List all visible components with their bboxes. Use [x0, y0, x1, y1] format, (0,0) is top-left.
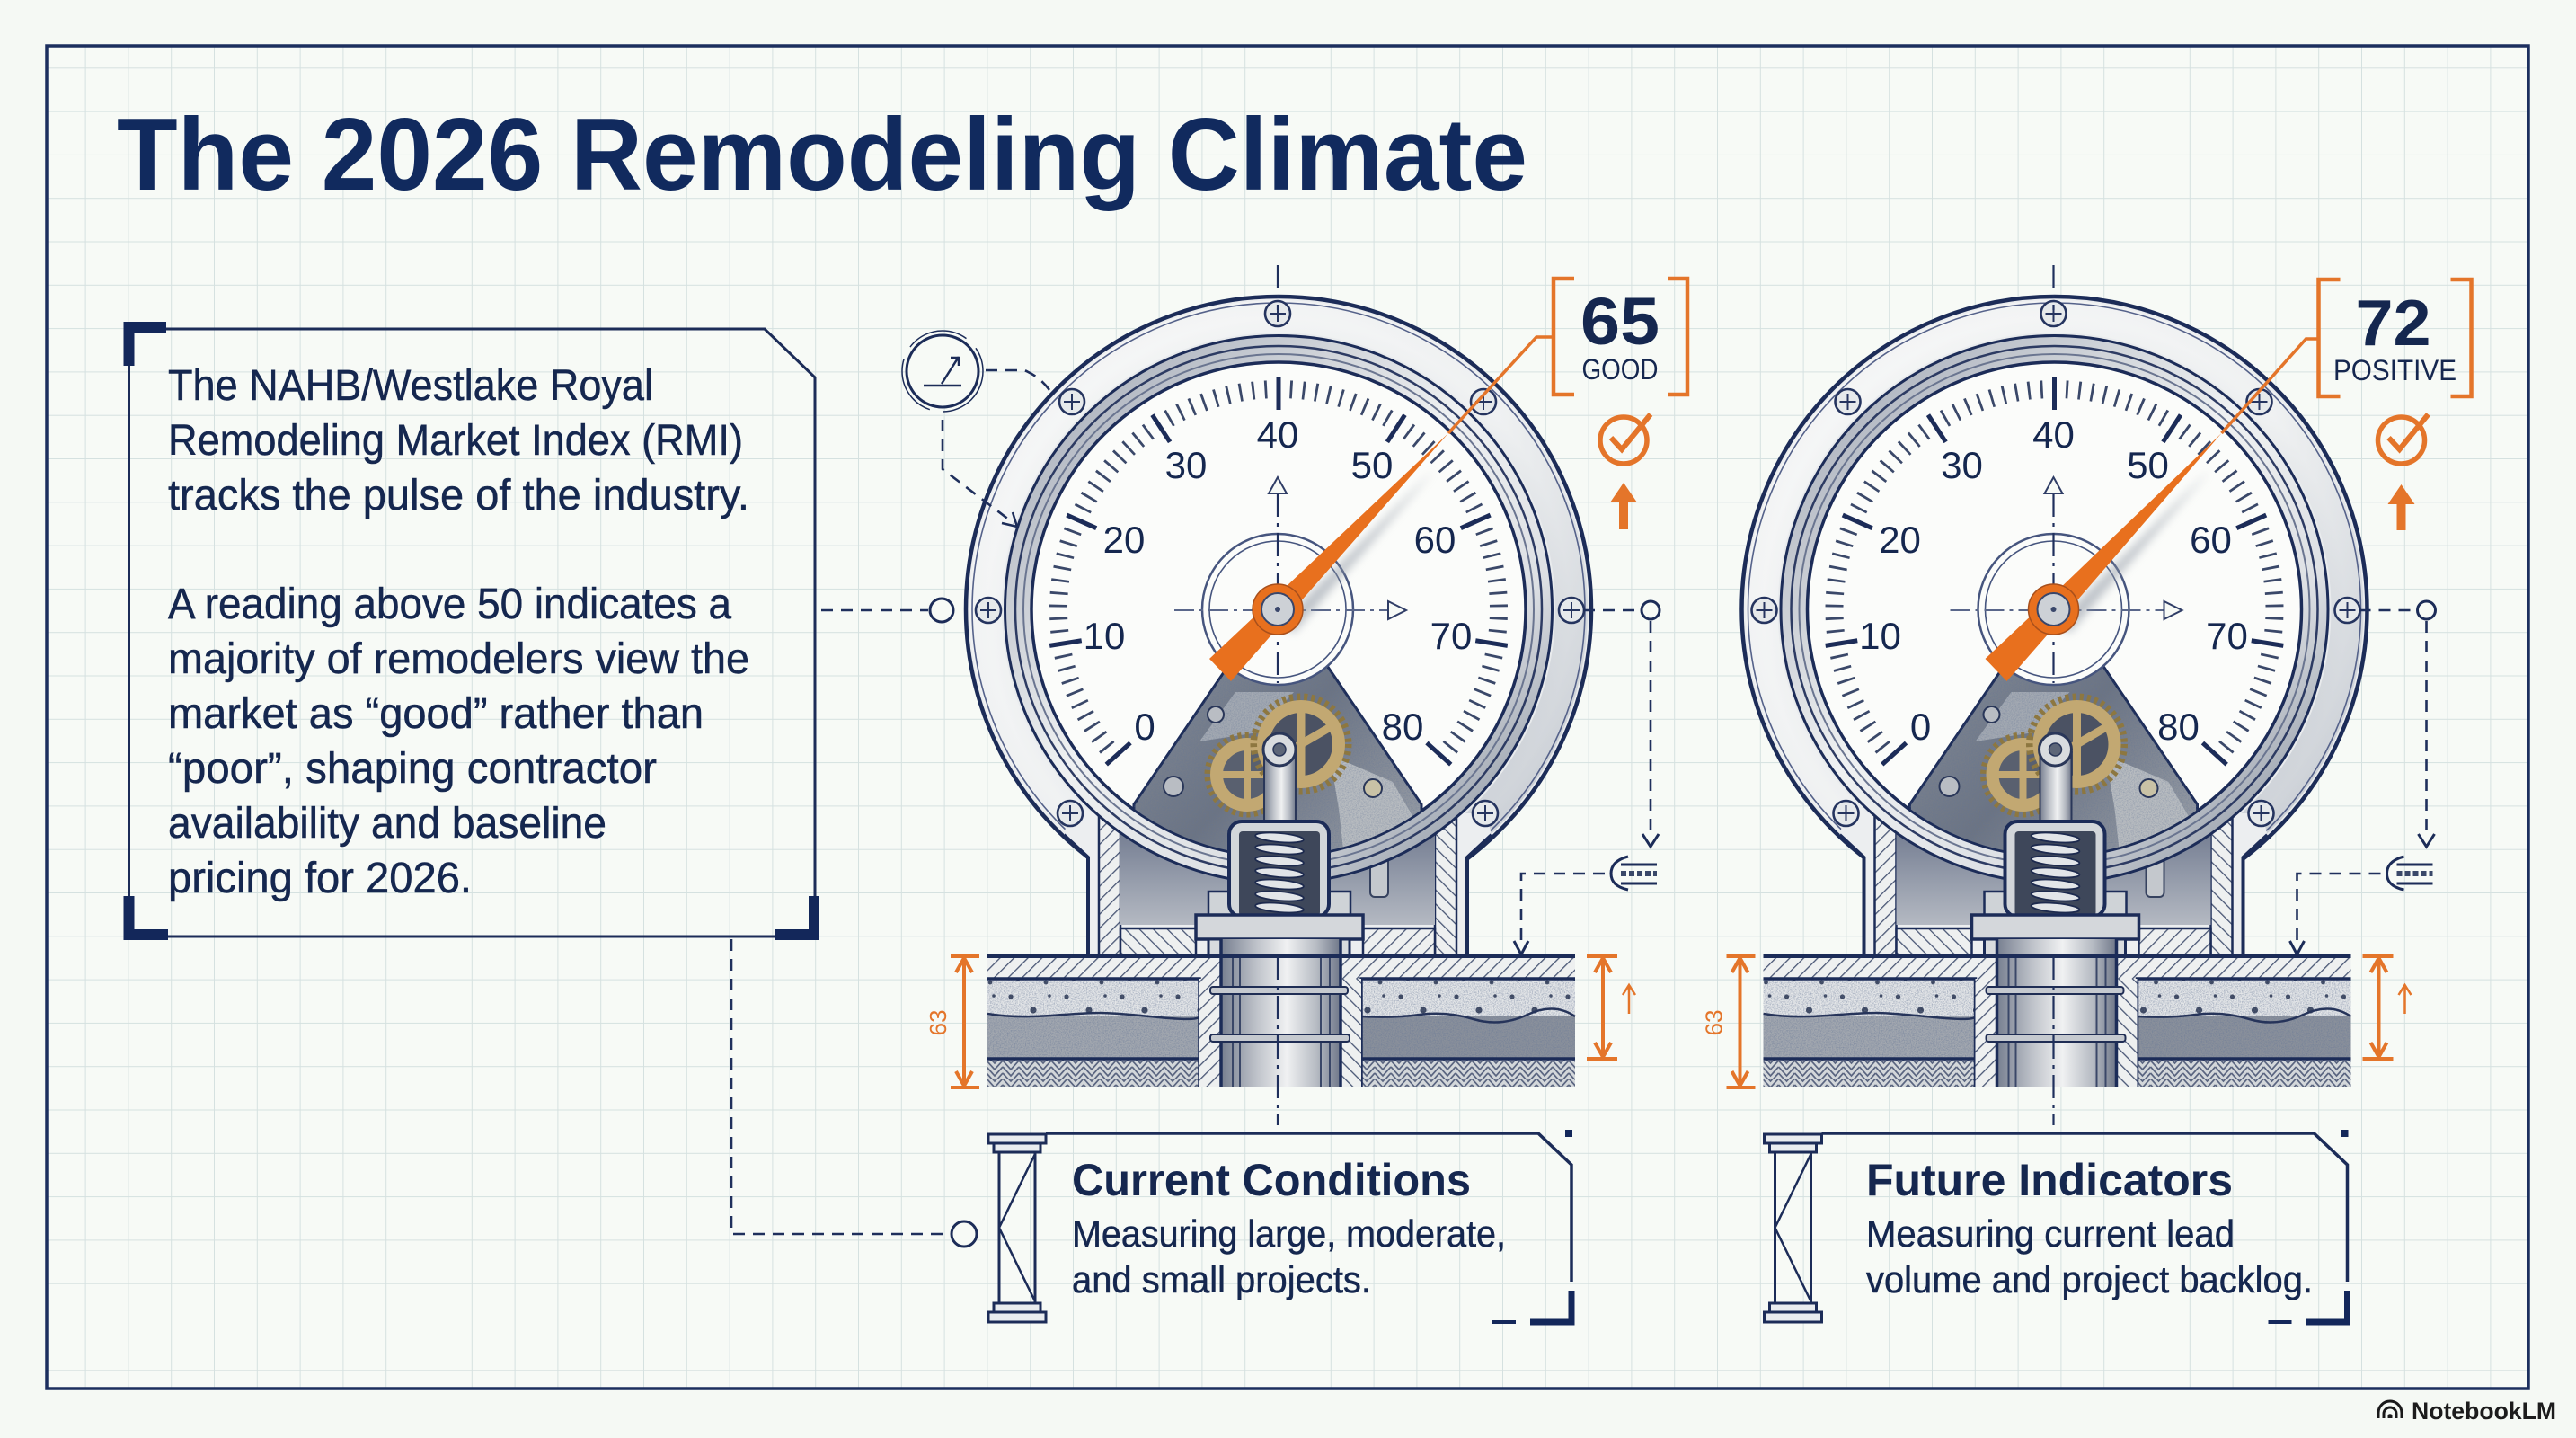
explanation text: tracks the pulse of the industry.: [168, 472, 749, 519]
value box: 72 positive: 72: [2356, 288, 2431, 360]
panel outline: [129, 329, 815, 936]
gauge: future indicators: [1700, 265, 2471, 1322]
gauge base housing: [1840, 813, 2268, 956]
connector: panel to first gauge: [821, 599, 953, 622]
connector: right bolt down to note: [1583, 601, 1660, 847]
dial numbers: 50: [2127, 444, 2169, 486]
panel description: Measuring large, moderate,: [1072, 1212, 1506, 1255]
panel description: Measuring current lead: [1866, 1212, 2235, 1255]
NotebookLM watermark: NotebookLM: [2412, 1398, 2556, 1425]
foundation cross-section: [987, 939, 1575, 1087]
connector: panel to current conditions: [731, 939, 977, 1247]
dial cross-hair arrows: [1174, 477, 1406, 619]
value box: 72 positive: [2318, 280, 2471, 396]
explanation text: [168, 362, 749, 902]
panel heading: Future Indicators: [1866, 1155, 2233, 1205]
panel heading: Current Conditions: [1072, 1155, 1471, 1205]
value box: 65 good: GOOD: [1581, 353, 1659, 386]
value leader line: [2221, 339, 2318, 433]
needle shadow: [2056, 469, 2210, 633]
icon: orange check: [1600, 414, 1651, 464]
gauge bolts: [1752, 301, 2359, 826]
dial numbers: 70: [1430, 615, 1472, 657]
gauge bezel rings: [1781, 336, 2327, 883]
explanation text: A reading above 50 indicates a: [168, 581, 731, 628]
dimension: left orange: [925, 956, 979, 1087]
spring and collar: [1971, 821, 2138, 956]
needle at 72: [1986, 433, 2221, 681]
dial numbers: [1859, 413, 2248, 748]
panel description: volume and project backlog.: [1866, 1258, 2313, 1300]
panel corner bracket: [2306, 1291, 2347, 1322]
needle at 65: [1209, 433, 1448, 681]
foundation cross-section: [1763, 939, 2350, 1087]
dial numbers: 20: [1103, 519, 1145, 561]
gauge bolts: [976, 301, 1584, 826]
arrow: orange up: [1610, 483, 1637, 529]
panel description: [1072, 1212, 1506, 1300]
icon: column: [988, 1134, 1046, 1322]
spring and collar: [1196, 821, 1363, 956]
arrow: orange up: [2388, 484, 2415, 530]
explanation text: market as “good” rather than: [168, 690, 704, 738]
dial hub window: [1202, 534, 1353, 685]
dial numbers: 30: [1165, 444, 1207, 486]
explanation text: availability and baseline: [168, 800, 606, 848]
dial numbers: 60: [1414, 519, 1456, 561]
dial numbers: 30: [1941, 444, 1983, 486]
panel description: and small projects.: [1072, 1258, 1371, 1300]
value box: 65 good: [1554, 279, 1687, 395]
dial numbers: [1084, 413, 1472, 748]
dimension: left orange: [1700, 956, 1756, 1087]
explanation text: pricing for 2026.: [168, 855, 472, 902]
gauge outer ring: [966, 297, 1591, 922]
icon: tool badge with leaders: [902, 331, 1053, 527]
dial hub window: [1978, 534, 2129, 685]
panel outline: [1046, 1133, 1571, 1282]
dimension: left orange: 63: [925, 1010, 952, 1035]
panel: RMI explanation: [129, 327, 815, 936]
gauge bezel rings: [1005, 336, 1552, 883]
icon: column: [1765, 1134, 1822, 1322]
explanation text: Remodeling Market Index (RMI): [168, 417, 743, 465]
panel: current conditions: [988, 1130, 1572, 1322]
dial tick marks: [1049, 377, 1508, 765]
dial numbers: 50: [1351, 444, 1393, 486]
icon: orange check: [2377, 414, 2428, 464]
icon: small annotation note: [1514, 857, 1657, 954]
dial numbers: 40: [2032, 413, 2075, 456]
dial numbers: 20: [1879, 519, 1921, 561]
needle shadow: [1279, 469, 1435, 633]
exposed gear mechanism: [1910, 593, 2200, 899]
corner brackets: [129, 327, 814, 935]
dial numbers: 70: [2206, 615, 2248, 657]
connector: right bolt down to note: [2359, 601, 2435, 847]
value leader line: [1448, 337, 1553, 433]
dimension: left orange: 63: [1700, 1010, 1727, 1035]
dial numbers: 0: [1910, 706, 1931, 748]
dial cross-hair arrows: [1950, 477, 2182, 619]
dial numbers: 10: [1859, 615, 1901, 657]
dial numbers: 80: [1382, 706, 1423, 748]
gauge: current conditions: [902, 265, 1687, 1322]
center line: [2052, 265, 2055, 1125]
dial numbers: 0: [1134, 706, 1155, 748]
explanation text: The NAHB/Westlake Royal: [168, 362, 653, 410]
gauge outer ring: [1741, 297, 2367, 922]
value box: 72 positive: POSITIVE: [2333, 354, 2456, 386]
panel description: [1866, 1212, 2313, 1300]
dial numbers: 80: [2157, 706, 2200, 748]
title: The 2026 Remodeling Climate: [117, 98, 1527, 212]
exposed gear mechanism: [1134, 593, 1424, 899]
center line: [1277, 265, 1279, 1125]
dial numbers: 60: [2190, 519, 2232, 561]
panel outline: [1822, 1133, 2347, 1282]
explanation text: “poor”, shaping contractor: [168, 745, 657, 793]
dimension: right orange: [2363, 956, 2412, 1059]
dial tick marks: [1826, 377, 2283, 765]
icon: small annotation note: [2289, 857, 2433, 954]
dial numbers: 10: [1084, 615, 1125, 657]
dial numbers: 40: [1257, 413, 1298, 456]
gauge base housing: [1064, 813, 1492, 956]
panel corner bracket: [1530, 1291, 1571, 1322]
explanation text: majority of remodelers view the: [168, 635, 749, 683]
value box: 65 good: 65: [1580, 284, 1660, 359]
dimension: right orange: [1587, 956, 1635, 1059]
panel: future indicators: [1765, 1130, 2349, 1322]
